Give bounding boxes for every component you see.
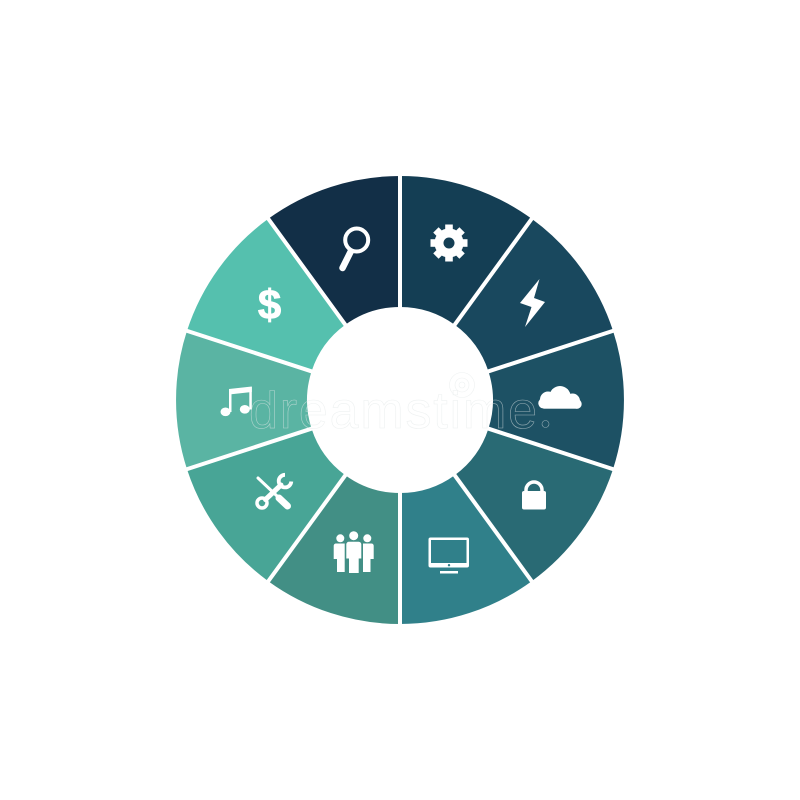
panel: lock segment <box>455 429 613 581</box>
icon: three people <box>334 531 374 573</box>
icon: dollar sign: $ <box>258 281 281 328</box>
icon: lightning bolt <box>520 279 545 327</box>
watermark: dreamstime <box>249 382 537 440</box>
panel: monitor segment <box>400 475 532 624</box>
panel: gear segment <box>400 176 532 325</box>
icon: crossed wrench and screwdriver <box>257 475 291 508</box>
icon: monitor <box>428 538 469 574</box>
icon: music notes <box>220 386 252 416</box>
panel: search segment <box>268 176 400 325</box>
panel: lightning segment <box>455 219 613 371</box>
panel: dollar segment <box>187 219 345 371</box>
panel: music segment <box>176 331 312 469</box>
panel: cloud segment <box>488 331 624 469</box>
icon: magnifying glass <box>342 228 368 268</box>
icon: padlock <box>522 482 546 510</box>
panel: people segment <box>268 475 400 624</box>
icon: gear <box>430 224 468 262</box>
icon: cloud <box>538 386 582 409</box>
panel: tools segment <box>187 429 345 581</box>
